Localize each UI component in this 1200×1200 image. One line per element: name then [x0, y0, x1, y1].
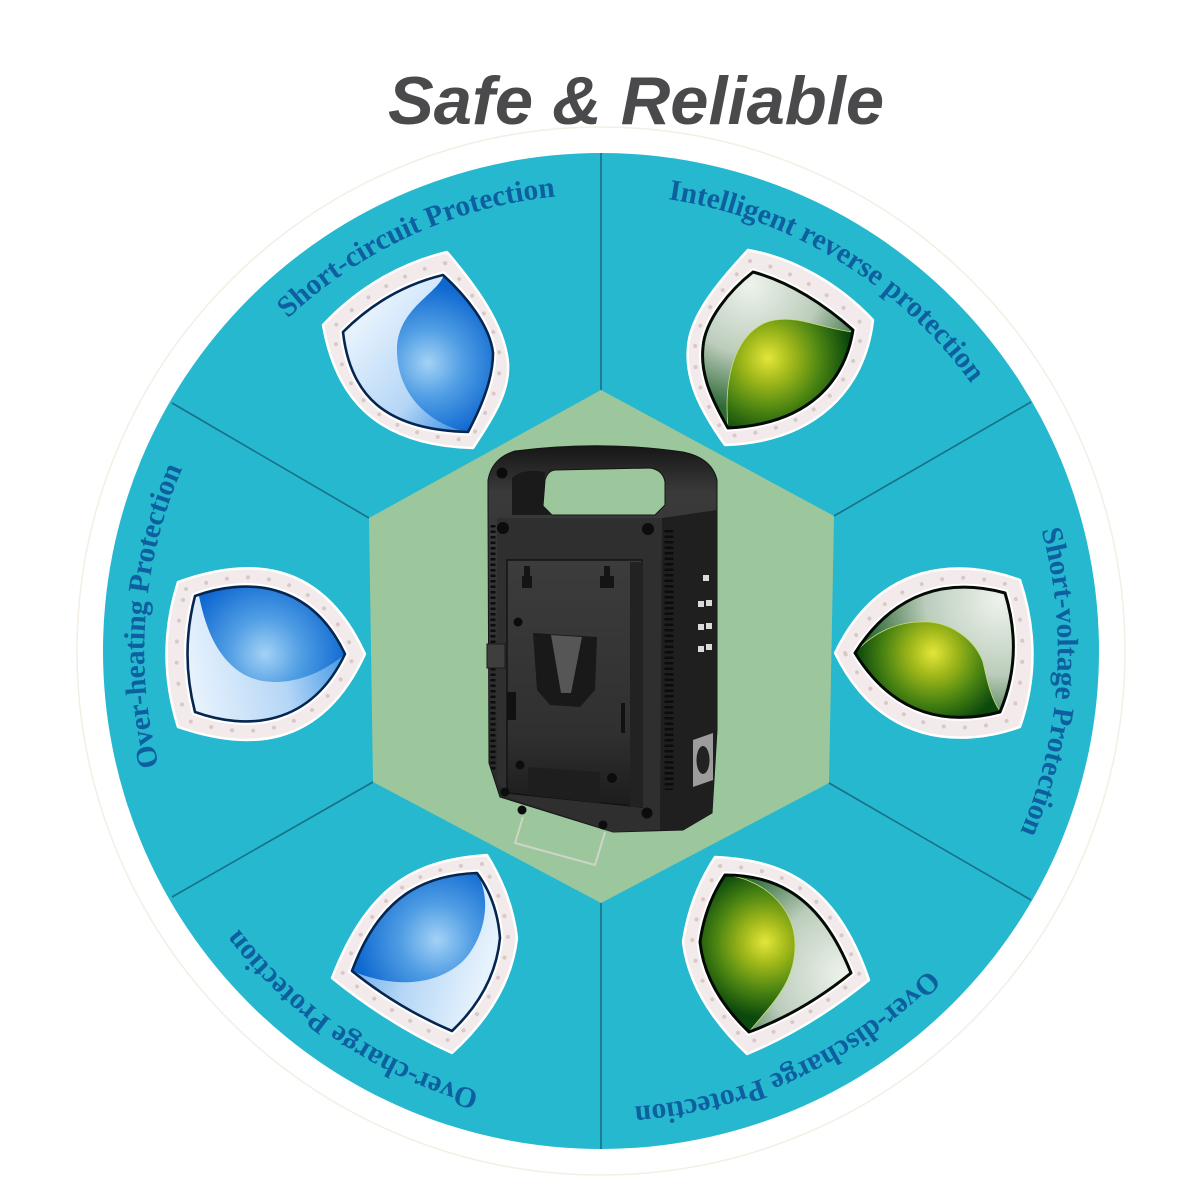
label: Over-heating Protection: Over-heating Protection: [124, 466, 182, 768]
label: Over-discharge Protection: Over-discharge Protection: [634, 974, 938, 1123]
icon: blue shield over-charge: [332, 855, 517, 1053]
icon: green shield reverse protection: [688, 250, 873, 445]
label: Short-voltage Protection: Short-voltage Protection: [1020, 528, 1078, 834]
icon: blue shield short-circuit: [323, 252, 508, 448]
side panel: [660, 510, 717, 830]
icon: green shield over-discharge: [683, 857, 869, 1054]
keyholes: [522, 566, 614, 588]
product: V-mount battery charger: [487, 446, 717, 865]
bottom terminal block: [528, 767, 600, 803]
label: Short-circuit Protection: Short-circuit Protection: [278, 181, 556, 317]
V slot: [533, 633, 597, 707]
indicator buttons: [698, 575, 712, 652]
label: Intelligent reverse protection: Intelligent reverse protection: [669, 180, 980, 383]
front plate: [497, 518, 662, 832]
wire stand: [515, 817, 605, 865]
icon: blue shield over-heating: [166, 568, 365, 740]
teal wheel: [103, 153, 1099, 1149]
icon: green shield short-voltage: [835, 568, 1032, 738]
battery mount plate: [507, 560, 642, 807]
cooling ribs: [664, 530, 674, 790]
charger body and handle: [488, 446, 717, 832]
side clip: [487, 644, 505, 668]
outer faint ring: [77, 127, 1125, 1175]
central hexagon: [369, 390, 834, 903]
handle grip shadow: [512, 471, 552, 515]
label: Over-charge Protection: Over-charge Protection: [230, 929, 476, 1108]
title: Safe & Reliable: [388, 63, 884, 139]
screws: [496, 468, 654, 830]
XLR connector: [693, 733, 713, 787]
slots: [507, 692, 516, 720]
